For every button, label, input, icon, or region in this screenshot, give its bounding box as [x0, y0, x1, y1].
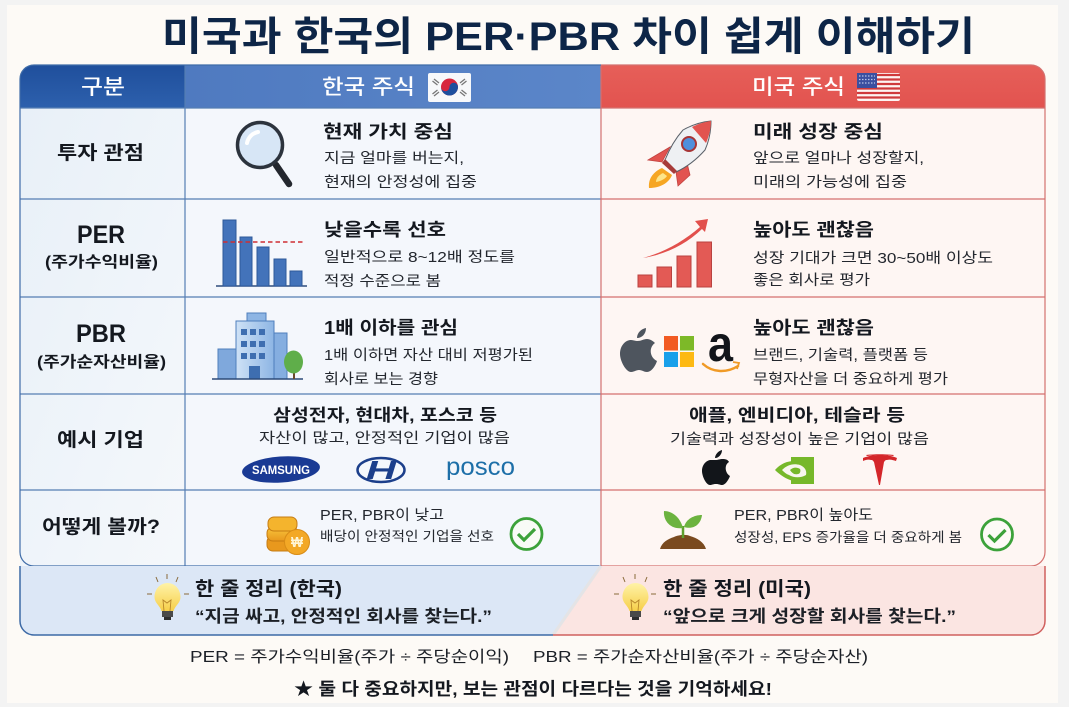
icon: coin stack [267, 517, 310, 554]
footer note: ★ 둘 다 중요하지만, 보는 관점이 다르다는 것을 기억하세요! [294, 679, 772, 699]
icon: office building [212, 313, 303, 379]
text: lower preferred [324, 220, 515, 290]
icon: green check [511, 518, 542, 550]
text: US companies [670, 406, 929, 448]
icon: coin stack: ₩ [291, 534, 304, 551]
row labels [37, 142, 166, 538]
logo: black apple [702, 450, 730, 485]
label: example companies: 예시 기업 [57, 429, 144, 451]
icon: four colour squares logo [664, 336, 694, 367]
text: US summary [663, 578, 956, 626]
US: how to view [660, 507, 1012, 550]
header: Korea stock: 한국 주식 [322, 76, 415, 99]
footer formulas: PBR = 주가순자산비율(주가 ÷ 주당순자산) [533, 648, 868, 666]
Korea: investment view [238, 122, 477, 191]
logo: POSCO: posco [446, 453, 515, 481]
Korea: example companies [241, 406, 515, 485]
text: below 1x: 1배 이하를 관심 [324, 318, 458, 338]
icon: US flag [857, 73, 900, 101]
text: high is okay: 좋은 회사로 평가 [753, 272, 870, 289]
text: lower preferred: 낮을수록 선호 [324, 220, 446, 240]
title: 미국과 한국의 PER·PBR 차이 쉽게 이해하기 [162, 15, 975, 59]
text: future growth: 미래 성장 중심 [753, 122, 883, 142]
text: current value [323, 122, 477, 191]
summary diagonal [553, 566, 601, 635]
text: high is okay: 높아도 괜찮음 [753, 220, 874, 240]
US: example companies [670, 406, 929, 485]
text: high but fine [734, 507, 962, 545]
text: below 1x [324, 318, 533, 388]
Korea: PER [216, 220, 515, 290]
icon: grey apple logo [620, 328, 657, 372]
icon: magnifying glass [238, 122, 289, 184]
icon: rocket [648, 121, 711, 188]
text: below 1x: 1배 이하면 자산 대비 저평가된 [324, 347, 533, 364]
US: PBR [620, 316, 948, 388]
text: high is okay: 성장 기대가 크면 30~50배 이상도 [753, 250, 993, 267]
header: US stock [752, 73, 900, 101]
text: intangible assets: 무형자산을 더 중요하게 평가 [753, 371, 948, 388]
table grid blue [20, 65, 601, 566]
text: low PER and PBR [320, 507, 494, 544]
header: US stock: 미국 주식 [752, 76, 845, 99]
Korea: how to view [267, 507, 542, 554]
icon: amazon logo: a [708, 316, 734, 372]
header: Korea stock [322, 73, 471, 102]
text: future growth: 미래의 가능성에 집중 [753, 174, 907, 191]
text: current value: 현재의 안정성에 집중 [324, 174, 477, 191]
comparison table [20, 65, 1045, 567]
label: PBR: PBR [76, 320, 126, 348]
US: investment view [648, 121, 924, 191]
icon: falling bar chart [216, 220, 307, 286]
table backgrounds [20, 65, 1045, 567]
text: US summary: “앞으로 크게 성장할 회사를 찾는다.” [663, 607, 956, 626]
label: PER: (주가수익비율) [45, 253, 158, 271]
footer formulas [190, 648, 868, 666]
text: future growth: 앞으로 얼마나 성장할지, [753, 150, 924, 167]
label: PER [45, 221, 158, 271]
text: lower preferred: 적정 수준으로 봄 [324, 273, 441, 290]
table outline right [601, 65, 1045, 566]
icon: light bulb US [614, 574, 656, 620]
summary band [20, 566, 1045, 635]
logo: NVIDIA [775, 457, 814, 484]
logo: Tesla [863, 454, 897, 485]
label: PBR: (주가순자산비율) [37, 353, 166, 371]
logo: Samsung: SAMSUNG [252, 463, 310, 477]
logo: Hyundai [358, 455, 404, 485]
icon: Korean flag [428, 73, 471, 102]
logo: Samsung [241, 454, 321, 485]
text: US companies: 기술력과 성장성이 높은 기업이 많음 [670, 431, 929, 448]
icon: green check [982, 519, 1012, 550]
text: current value: 현재 가치 중심 [323, 122, 453, 142]
text: lower preferred: 일반적으로 8~12배 정도를 [324, 249, 515, 266]
text: high but fine: 성장성, EPS 증가율을 더 중요하게 봄 [734, 530, 962, 545]
text: current value: 지금 얼마를 버는지, [324, 150, 464, 167]
text: Korea summary [195, 578, 492, 626]
text: low PER and PBR: PER, PBR이 낮고 [320, 507, 444, 524]
label: investment view: 투자 관점 [57, 142, 144, 164]
text: high is okay [753, 220, 993, 289]
label: how to view: 어떻게 볼까? [42, 516, 160, 538]
text: below 1x: 회사로 보는 경향 [324, 371, 438, 388]
text: US companies: 애플, 엔비디아, 테슬라 등 [689, 406, 905, 425]
text: Korea summary: 한 줄 정리 (한국) [195, 578, 342, 600]
logo: Hyundai: H [366, 455, 398, 485]
US: PER [638, 219, 993, 289]
icon: rising bar chart [638, 219, 712, 287]
icon: light bulb Korea [147, 574, 189, 620]
text: high but fine: PER, PBR이 높아도 [734, 507, 873, 524]
text: Korean companies: 자산이 많고, 안정적인 기업이 많음 [259, 430, 510, 447]
summary panel: Korea [20, 566, 601, 635]
text: Korean companies [259, 406, 510, 447]
text: intangible assets: 높아도 괜찮음 [753, 318, 874, 338]
footer formulas: PER = 주가수익비율(주가 ÷ 주당순이익) [190, 648, 509, 666]
summary outline right [553, 566, 1045, 635]
summary outline left [20, 566, 553, 635]
text: intangible assets: 브랜드, 기술력, 플랫폼 등 [753, 347, 928, 364]
summary panel: US [553, 566, 1045, 635]
text: Korean companies: 삼성전자, 현대차, 포스코 등 [273, 406, 497, 425]
label: PER: PER [77, 221, 125, 249]
label: PBR [37, 320, 166, 371]
icon: sprout [660, 511, 706, 549]
text: future growth [753, 122, 924, 191]
text: US summary: 한 줄 정리 (미국) [663, 578, 811, 600]
text: intangible assets [753, 318, 948, 388]
header: category: 구분 [81, 76, 125, 99]
table outline left [20, 65, 601, 566]
Korea: PBR [212, 313, 533, 388]
text: low PER and PBR: 배당이 안정적인 기업을 선호 [320, 529, 494, 544]
table grid red [601, 65, 1045, 566]
text: Korea summary: “지금 싸고, 안정적인 회사를 찾는다.” [195, 607, 492, 626]
